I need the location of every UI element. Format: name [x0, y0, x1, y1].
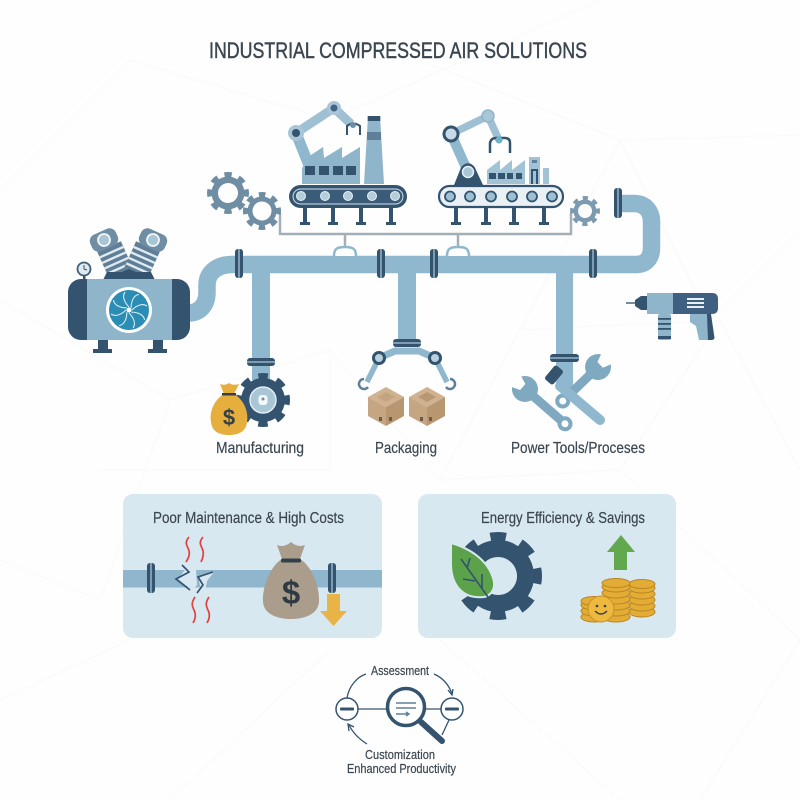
- label: assessment: Assessment: [371, 663, 429, 678]
- label: customization: Customization: [365, 747, 435, 762]
- panel: energy efficiency: [418, 494, 676, 638]
- title: INDUSTRIAL COMPRESSED AIR SOLUTIONS: [209, 38, 587, 63]
- label: enhanced productivity: Enhanced Productivity: [347, 761, 456, 776]
- node left: [336, 698, 358, 720]
- panel: poor maintenance: [123, 494, 382, 638]
- branch: power tools: [508, 350, 645, 457]
- cylinder right: [121, 226, 169, 286]
- branch: packaging: [359, 351, 455, 457]
- factory line two: [439, 110, 563, 225]
- label: manufacturing: Manufacturing: [216, 440, 304, 457]
- heading: Poor Maintenance & High Costs: [153, 510, 344, 527]
- factory line one: [288, 101, 406, 225]
- smiley coin: [588, 596, 614, 622]
- cycle arrows: [347, 674, 453, 744]
- branch: manufacturing: [211, 372, 304, 457]
- icon: boxes: [368, 387, 445, 426]
- node right: [441, 698, 463, 720]
- label: packaging: Packaging: [375, 440, 437, 457]
- main pipe network: [188, 188, 652, 388]
- icon: coin stacks: [581, 578, 655, 622]
- compressor: [68, 226, 190, 353]
- icon: gear right: [570, 196, 600, 226]
- process cycle: [336, 663, 463, 776]
- label: power tools: Power Tools/Proceses: [511, 440, 645, 457]
- icon: money bag: [263, 542, 319, 619]
- icon: drill: [626, 293, 718, 340]
- cylinder left: [88, 226, 136, 286]
- icon: arrow up: [607, 535, 635, 570]
- icon: leak squiggles: [186, 537, 209, 623]
- icon: gear left: [206, 171, 250, 215]
- pipe with crack: [123, 563, 382, 596]
- heading: Energy Efficiency & Savings: [481, 510, 645, 527]
- gauge: [78, 262, 90, 280]
- control line: [280, 213, 571, 256]
- icon: gear middle: [243, 192, 281, 230]
- icon: gear with seal: [235, 372, 291, 428]
- claw: [359, 351, 455, 389]
- fan: [106, 287, 152, 333]
- icon: magnifier: [388, 688, 442, 741]
- icon: leaf: [451, 543, 494, 597]
- icon: money bag: $: [282, 574, 300, 611]
- icon: arrow down: [320, 594, 347, 626]
- icon: gear: [452, 530, 544, 622]
- icon: money bag gold: $: [223, 405, 235, 430]
- icon: wrenches: [508, 350, 615, 439]
